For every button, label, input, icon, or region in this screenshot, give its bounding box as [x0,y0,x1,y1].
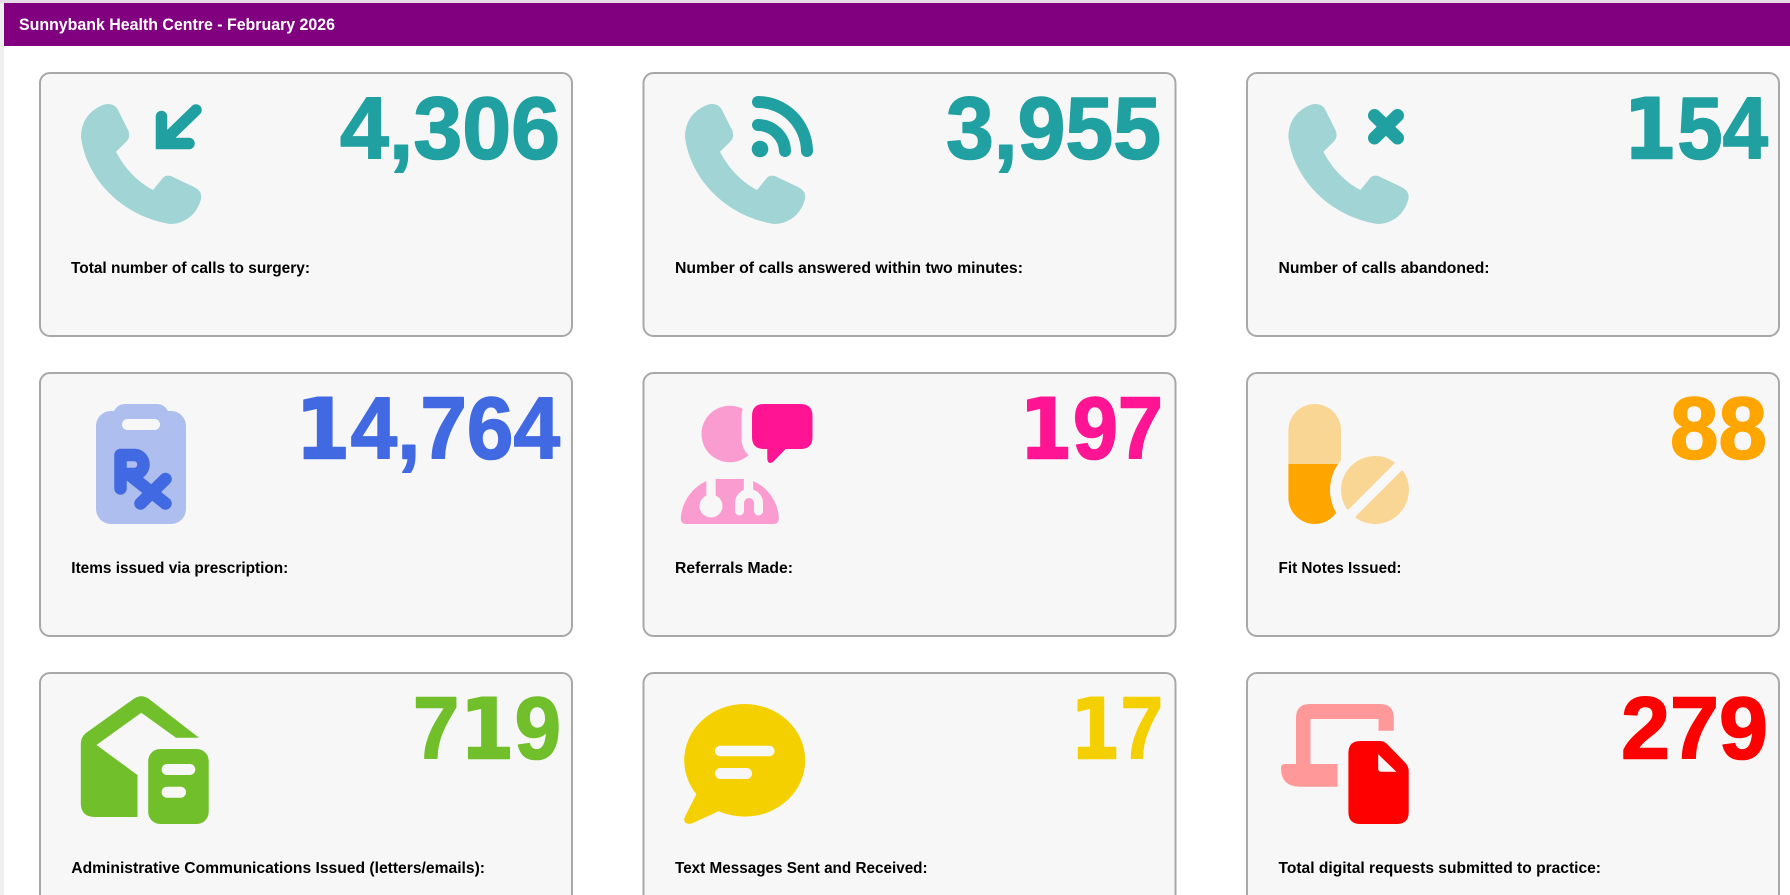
icon: phone with signal waves [685,102,807,224]
label: Total digital requests submitted to practice: [1278,860,1601,877]
label: Number of calls abandoned: [1278,260,1490,277]
icon: prescription clipboard [96,404,186,524]
number: 3,955 [946,79,1161,178]
panel: calls answered [644,73,1176,336]
panel: digital requests [1247,673,1779,895]
number: 279 [1621,679,1768,778]
label: Fit Notes Issued: [1278,560,1402,577]
panel: text messages [644,673,1176,895]
icon: doctor with speech bubble [681,394,824,524]
number: 88 [1670,379,1767,478]
label: Referrals Made: [675,560,793,577]
title: Sunnybank Health Centre - February 2026 [19,16,335,34]
panel: fit notes [1247,373,1779,636]
number: 4,306 [340,79,560,178]
label: Total number of calls to surgery: [71,260,310,277]
number: 14,764 [295,379,560,479]
icon: capsule and tablet [1288,404,1420,535]
number: 197 [1019,379,1163,479]
number: 719 [413,679,561,779]
panel: prescriptions [40,373,572,636]
icon: laptop with document [1281,704,1409,824]
icon: phone with incoming arrow [81,104,201,224]
panel: administrative communications [40,673,572,895]
panel: calls abandoned [1247,73,1779,336]
icon: phone with cross [1288,104,1409,224]
icon: chat bubble [684,704,805,824]
panel: total calls [40,73,572,336]
panel: referrals [644,373,1176,636]
label: Number of calls answered within two minutes: [675,260,1023,277]
header bar [4,3,1790,46]
label: Text Messages Sent and Received: [675,860,928,877]
number: 17 [1070,679,1163,779]
icon: envelope with document [81,696,209,824]
number: 154 [1623,79,1768,179]
label: Items issued via prescription: [71,560,288,577]
label: Administrative Communications Issued (letters/emails): [71,860,485,877]
